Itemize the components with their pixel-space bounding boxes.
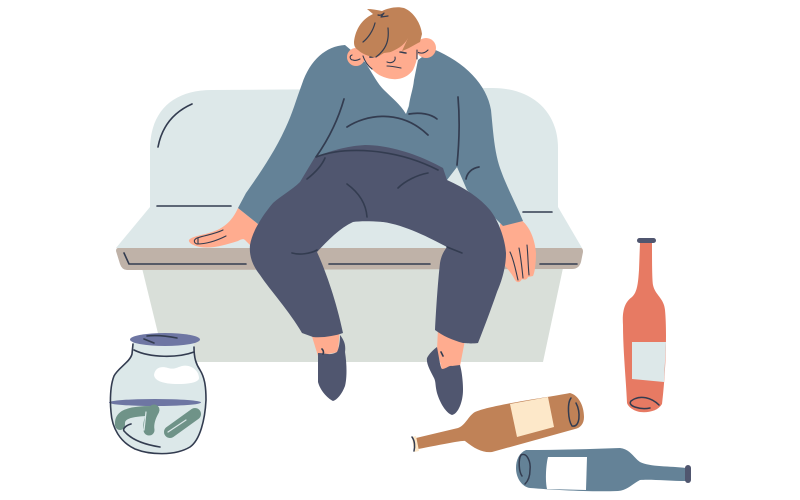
bench detail lines xyxy=(124,104,577,264)
red bottle cap xyxy=(637,238,656,243)
left hand xyxy=(189,208,258,248)
blue bottle xyxy=(516,448,691,491)
red bottle xyxy=(623,238,666,412)
face xyxy=(360,35,419,79)
ears xyxy=(347,38,436,66)
hair xyxy=(354,7,422,57)
white shirt xyxy=(370,60,420,118)
jar lid xyxy=(130,333,200,346)
jar liquid line xyxy=(109,399,201,406)
right hand xyxy=(500,219,536,282)
brown bottle label xyxy=(510,397,554,437)
face features xyxy=(363,50,417,69)
right foot xyxy=(427,328,466,415)
jar highlight xyxy=(154,366,199,384)
trouser fold lines xyxy=(292,150,462,356)
blue bottle label xyxy=(546,457,587,490)
bench seat xyxy=(116,207,582,248)
jar glass xyxy=(110,342,206,454)
man xyxy=(189,7,536,415)
red bottle label xyxy=(632,342,666,382)
pickles xyxy=(120,410,195,432)
jar xyxy=(109,333,206,454)
bench backrest xyxy=(150,88,558,210)
sweater fold lines xyxy=(316,97,479,179)
brown bottle xyxy=(412,393,584,452)
left foot xyxy=(310,328,346,401)
blue bottle cap xyxy=(685,465,691,483)
bench xyxy=(116,88,583,362)
trousers xyxy=(250,145,506,343)
brown bottle cap xyxy=(412,436,419,452)
bench base xyxy=(142,268,563,362)
jar outline xyxy=(110,336,206,454)
bench front edge xyxy=(116,248,583,270)
sweater xyxy=(238,45,523,226)
